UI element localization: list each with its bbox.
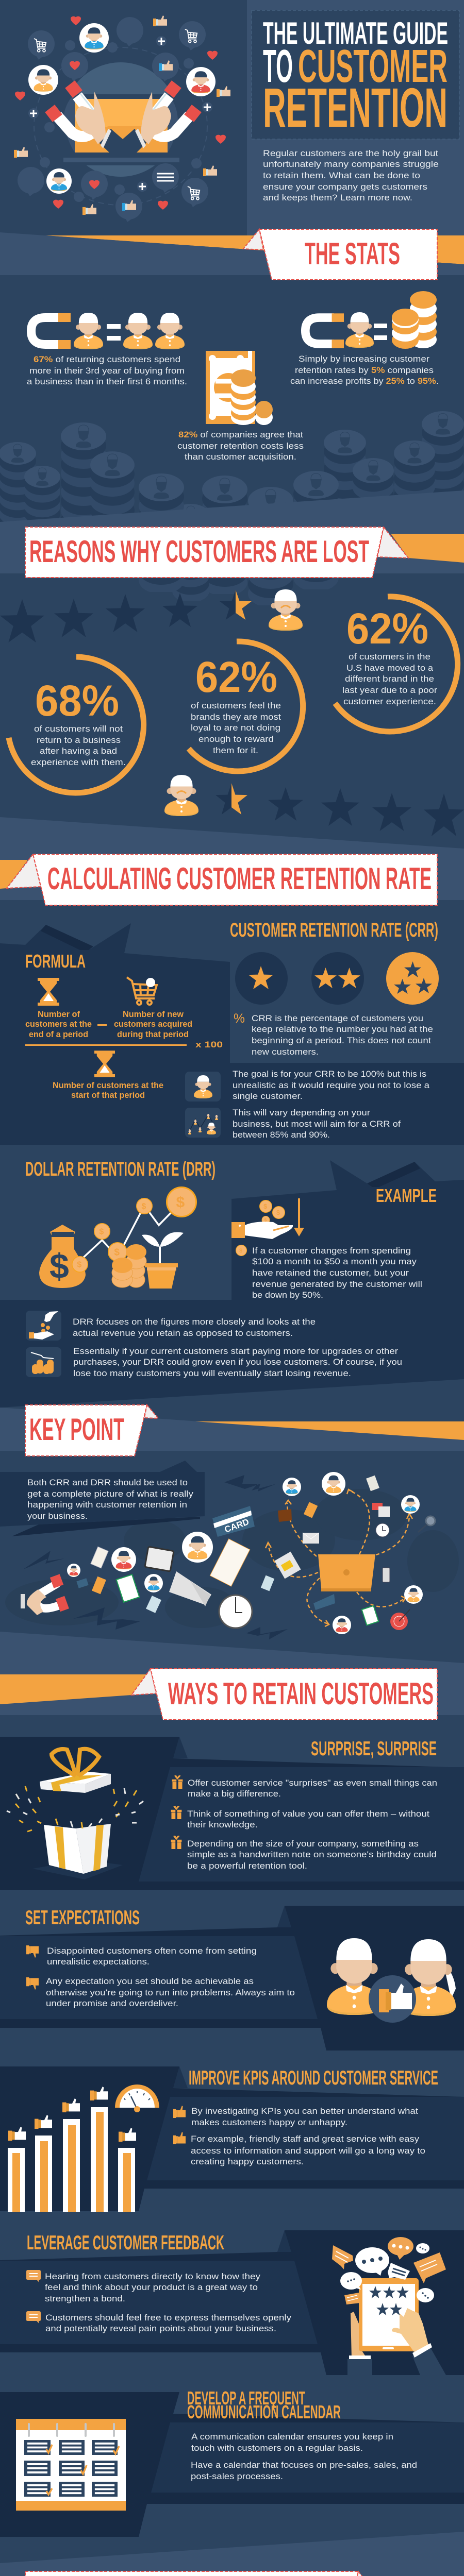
stat circle: 62 percent brands: brands they are most — [191, 712, 281, 722]
target text: business, but most will aim for a CRR of — [233, 1119, 401, 1129]
illustration: gift box — [7, 1749, 143, 1879]
icon: speedometer — [115, 2084, 159, 2112]
icon: laptop — [318, 1554, 375, 1591]
stat text — [177, 430, 304, 462]
stat circle: 68 percent: of customers will not — [34, 724, 123, 734]
stat text: 67% of returning customers spend — [34, 354, 180, 364]
dashed arrows — [268, 1490, 409, 1624]
goal text: single customer. — [233, 1091, 303, 1101]
banner: calculating customer retention rate — [7, 854, 437, 905]
banner: key point: KEY POINT — [29, 1412, 124, 1447]
list: KPIs: By investigating KPIs you can better understand what — [191, 2106, 418, 2116]
icon: customer — [185, 1072, 221, 1101]
star rating row: top — [0, 589, 303, 642]
stat circle: 62 percent US: different brand in the — [345, 674, 434, 684]
banner: reasons why customers are lost — [25, 527, 408, 578]
target text: between 85% and 90%. — [233, 1130, 330, 1140]
panel: key point text — [0, 1461, 205, 1536]
formula text: numerator left: Number of — [38, 1009, 80, 1019]
goal text: unrealistic as it would require you not to lose a — [233, 1080, 430, 1090]
formula text: numerator left: customers at the — [25, 1019, 92, 1029]
heading: communication calendar — [187, 2387, 341, 2422]
stat circle: 62 percent brands: of customers feel the — [191, 701, 281, 710]
list: expectations: Any expectation you set should be achievable as — [46, 1976, 254, 1986]
world map backdrop — [5, 1489, 459, 1628]
CRR target — [185, 1108, 401, 1140]
heading: set expectations: SET EXPECTATIONS — [25, 1907, 140, 1929]
panel: surprise, surprise — [0, 1737, 464, 1890]
banner: the stats — [243, 229, 437, 280]
CRR goal — [185, 1069, 430, 1101]
icon: magnet attracts customers — [31, 313, 185, 349]
header panel — [0, 0, 464, 275]
list: surprises: simple as a handwritten note on someone's birthday could — [187, 1850, 437, 1859]
stat circle: 62 percent US: customer experience. — [343, 697, 436, 706]
icon: pen and coins — [26, 1311, 61, 1341]
text — [73, 1317, 316, 1338]
icon: hourglass — [38, 978, 59, 1006]
panel: key point text: Both CRR and DRR should be used to — [27, 1478, 188, 1487]
heading: formula: FORMULA — [25, 951, 86, 972]
stat: 5 percent — [290, 291, 439, 386]
heading: leverage customer feedback: LEVERAGE CUSTOMER FEEDBACK — [27, 2232, 224, 2254]
intro text: Regular customers are the holy grail but — [263, 148, 438, 158]
illustration: hand dropping coins — [231, 1198, 304, 1239]
stat: 67 percent — [27, 313, 187, 386]
list: KPIs: makes customers happy or unhappy. — [191, 2117, 347, 2127]
formula: times 100: x 100 — [195, 1040, 223, 1049]
stat circle: 68 percent: return to a business — [37, 735, 121, 745]
icon: hourglass — [94, 1050, 115, 1077]
calendar text: touch with customers on a regular basis. — [191, 2443, 363, 2453]
stat text: Simply by increasing customer — [299, 354, 429, 364]
calendar text: Have a calendar that focuses on pre-sales, sales, and — [191, 2460, 417, 2470]
stat circle: 62 percent brands — [189, 641, 303, 771]
text: purchases, your DRR could grow even if you lose customers. Of course, if you — [73, 1357, 402, 1367]
bar chart with thumbs — [8, 2087, 136, 2212]
stat circle: 62 percent US: 62% — [346, 604, 428, 653]
formula text: numerator right: Number of new — [123, 1009, 184, 1019]
list: surprises: make a big difference. — [188, 1789, 281, 1799]
stat circle: 62 percent brands: enough to reward — [198, 734, 274, 744]
panel: set expectations — [0, 1906, 464, 2050]
list: surprises: their knowledge. — [187, 1820, 258, 1829]
example text: revenue generated by the customer will — [252, 1279, 422, 1289]
illustration: tablet reviews — [332, 2237, 446, 2375]
panel: key point text: get a complete picture of what is really — [27, 1489, 194, 1499]
stat: 82 percent — [177, 351, 304, 462]
icon: loyalty card: CARD — [223, 1517, 251, 1535]
stat circle: 62 percent US: U.S have moved to a — [346, 663, 434, 673]
stat circle: 62 percent US: last year due to a poor — [342, 685, 437, 695]
background coin stacks with customers — [0, 411, 464, 607]
example text: be down by 50%. — [252, 1290, 323, 1300]
example text: If a customer changes from spending — [252, 1246, 411, 1256]
stat text: a business than in their first 6 months. — [27, 377, 187, 386]
list: KPIs — [173, 2106, 425, 2166]
text: Essentially if your current customers start paying more for upgrades or other — [73, 1346, 398, 1356]
list: feedback: Hearing from customers directly to know how they — [45, 2272, 261, 2281]
text: DRR focuses on the figures more closely and looks at the — [73, 1317, 316, 1327]
target text: This will vary depending on your — [233, 1108, 370, 1117]
list: surprises: Depending on the size of your company, something as — [187, 1839, 419, 1849]
intro text — [263, 148, 439, 202]
illustration: money bag, chart, coins and plant: $ — [49, 1247, 69, 1286]
stat circle: 68 percent: after having a bad — [40, 746, 117, 756]
calendar text: A communication calendar ensures you keep in — [191, 2432, 393, 2442]
CRR definition — [234, 1011, 433, 1057]
stat circle: 68 percent — [9, 657, 144, 793]
icon: magnet and hand — [21, 1574, 69, 1615]
list: expectations: unrealistic expectations. — [47, 1957, 150, 1967]
formula text: numerator left: end of a period — [29, 1029, 88, 1039]
icon: magnet and coins — [305, 291, 437, 349]
calendar text: post-sales processes. — [191, 2471, 283, 2481]
stat circle: 62 percent brands: 62% — [195, 653, 277, 701]
heading: dollar retention rate: DOLLAR RETENTION RATE (DRR) — [25, 1158, 216, 1180]
list: KPIs: access to information and support will go a long way to — [191, 2146, 425, 2156]
stat text: more in their 3rd year of buying from — [29, 366, 185, 376]
heading: example: EXAMPLE — [376, 1185, 437, 1206]
DRR growth — [26, 1346, 402, 1378]
text — [73, 1346, 402, 1378]
illustration: customers and thumbs up — [327, 1938, 456, 2023]
list: surprises: be a powerful retention tool. — [187, 1861, 307, 1871]
list: feedback: strengthen a bond. — [45, 2294, 125, 2303]
CRR definition: % — [234, 1011, 245, 1026]
goal text — [233, 1069, 430, 1101]
calendar text — [191, 2432, 417, 2481]
list: expectations: Disappointed customers often come from setting — [47, 1946, 257, 1956]
list: expectations: under promise and overdeliver. — [46, 1998, 178, 2008]
intro text: to retain them. What can be done to — [263, 171, 420, 180]
DRR focus — [26, 1311, 316, 1341]
illustration: customer connections — [21, 1472, 435, 1639]
list: feedback — [26, 2270, 292, 2333]
heading: communication calendar: DEVELOP A FREQUENT — [187, 2387, 305, 2409]
panel: key point text: happening with customer retention in — [27, 1500, 187, 1510]
CRR definition: beginning of a period. This does not count — [252, 1036, 431, 1045]
stat text — [27, 354, 187, 386]
list: feedback: and potentially reveal pain points about your business. — [45, 2324, 276, 2333]
icon: shopping cart — [127, 977, 157, 1005]
illustration: money bag, chart, coins and plant — [39, 1187, 196, 1289]
stat circle: 62 percent brands: them for it. — [213, 745, 258, 755]
text: actual revenue you retain as opposed to customers. — [73, 1328, 293, 1338]
stat circle: 62 percent brands: loyal to are not doing — [191, 723, 280, 733]
list: KPIs: For example, friendly staff and great service with easy — [191, 2134, 420, 2144]
stat circle: 62 percent US: of customers in the — [349, 652, 430, 662]
stat text: 82% of companies agree that — [178, 430, 303, 439]
example text — [236, 1245, 422, 1300]
list: surprises — [171, 1776, 437, 1871]
formula text: numerator left — [25, 1009, 92, 1039]
CRR definition: keep relative to the number you had at the — [252, 1024, 433, 1034]
CRR definition: new customers. — [252, 1047, 319, 1057]
title: TO — [263, 41, 293, 92]
example text: have retained the customer, but your — [252, 1268, 409, 1278]
stat text: than customer acquisition. — [185, 452, 296, 462]
banner: insight on customer retention — [25, 2571, 380, 2576]
heading: communication calendar: COMMUNICATION CALENDAR — [187, 2401, 341, 2422]
formula text: numerator right — [114, 1009, 192, 1039]
panel: dollar retention rate — [0, 1145, 464, 1408]
stat text: customer retention costs less — [177, 441, 304, 451]
list: feedback: Customers should feel free to express themselves openly — [45, 2313, 292, 2323]
goal text: The goal is for your CRR to be 100% but this is — [233, 1069, 426, 1079]
banner: ways to retain customers — [131, 1669, 437, 1720]
list: expectations: otherwise you're going to run into problems. Always aim to — [46, 1988, 295, 1997]
formula text: denominator: start of that period — [71, 1090, 145, 1100]
target text — [233, 1108, 401, 1140]
formula text: denominator — [53, 1080, 163, 1100]
header illustration: magnets attracting customers — [14, 15, 230, 222]
panel: improve KPIs — [0, 2066, 464, 2212]
intro text: unfortunately many companies struggle — [263, 159, 439, 169]
stat circle: 68 percent: experience with them. — [31, 757, 126, 767]
icon: growth chart — [185, 1108, 221, 1138]
text: lose too many customers you will eventually start losing revenue. — [73, 1368, 351, 1378]
stat text: can increase profits by 25% to 95%. — [290, 376, 439, 386]
list: surprises: Offer customer service "surprises" as even small things can — [188, 1778, 437, 1788]
icon: falling line and coins — [26, 1347, 61, 1377]
list: expectations — [26, 1945, 295, 2008]
panel: communication calendar — [0, 2387, 464, 2537]
title — [263, 16, 448, 139]
intro text: ensure your company gets customers — [263, 182, 427, 192]
formula text: numerator right: during that period — [117, 1029, 189, 1039]
stat circle: 68 percent: 68% — [35, 676, 119, 725]
panel: key point text: your business. — [27, 1511, 88, 1521]
list: KPIs: creating happy customers. — [191, 2157, 304, 2166]
icon: banknote and coins — [206, 351, 273, 425]
formula text: numerator right: customers acquired — [114, 1019, 192, 1029]
star rating circles — [235, 952, 439, 1005]
icon: loyalty card — [212, 1506, 255, 1537]
list: feedback: feel and think about your product is a great way to — [45, 2282, 258, 2292]
banner: key point — [25, 1405, 158, 1456]
panel: leverage customer feedback — [0, 2230, 464, 2375]
intro text: and keeps them? Learn more now. — [263, 193, 412, 202]
star rating row: bottom — [164, 775, 464, 836]
example text: $100 a month to $50 a month you may — [252, 1257, 417, 1266]
illustration: calendar — [16, 2419, 126, 2511]
stat text — [290, 354, 439, 386]
stat text: retention rates by 5% companies — [295, 365, 434, 375]
formula text: denominator: Number of customers at the — [53, 1080, 163, 1090]
title box — [252, 10, 459, 139]
panel: formula — [0, 923, 464, 1145]
CRR definition: CRR is the percentage of customers you — [252, 1013, 423, 1023]
stat circle: 62 percent US — [335, 597, 458, 732]
list: surprises: Think of something of value you can offer them – without — [187, 1809, 429, 1819]
